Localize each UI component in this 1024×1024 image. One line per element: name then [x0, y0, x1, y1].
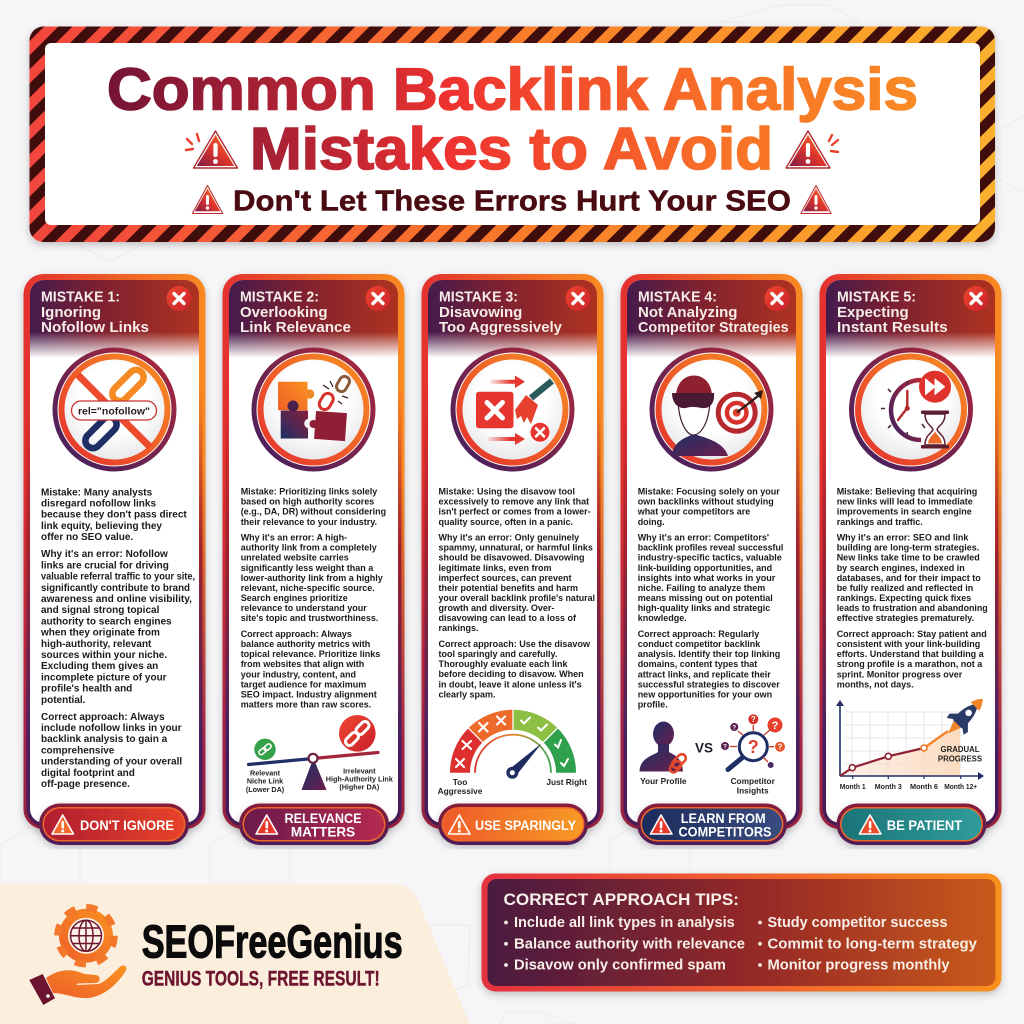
- text: why it's an error: valuable referral traffic to your site,: [41, 572, 195, 583]
- text: mistake: isn't perfect or comes from a lower-: [438, 507, 591, 517]
- text: mistake: because they don't pass direct: [41, 510, 187, 521]
- card title: Instant Results: [837, 319, 948, 336]
- text: mistake: Mistake: Many analysts: [41, 488, 153, 498]
- text: correct approach: topical relevance. Prioritize links: [241, 649, 380, 659]
- chart: profile versus competitor: Insights: [737, 785, 769, 795]
- text: why it's an error: profile's health and: [41, 684, 132, 695]
- text: why it's an error: awareness and online visibility,: [41, 594, 192, 605]
- card title: MISTAKE 3:: [439, 289, 518, 306]
- text: correct approach: attract links, and replicate their: [638, 669, 771, 679]
- icon: close badge: [764, 286, 790, 311]
- icon: disavow broom: [453, 350, 572, 469]
- text: correct approach: conduct competitor backlink: [638, 639, 761, 649]
- text: why it's an error: your overall backlink profile's natural: [438, 593, 595, 603]
- text: mistake: quality source, often in a panic.: [438, 517, 573, 527]
- tips column 1: Include all link types in analysis: [514, 915, 735, 931]
- text: mistake: Mistake: Using the disavow tool: [438, 487, 575, 497]
- text: why it's an error: links are crucial for driving: [41, 560, 169, 571]
- text: mistake: excessively to remove any link that: [438, 497, 589, 507]
- icon: warning left large: [186, 131, 238, 168]
- chart: balance scale: [246, 715, 393, 794]
- text: why it's an error: knowledge.: [638, 613, 687, 623]
- chart: profile versus competitor: ?: [772, 720, 779, 732]
- text: why it's an error: disavowing can lead to a loss of: [438, 613, 577, 623]
- text: correct approach: balance authority metrics with: [241, 639, 370, 649]
- chart: balance scale: Niche Link: [247, 776, 283, 786]
- text: why it's an error: growth and diversity. Over-: [438, 603, 554, 613]
- icon: close badge: [964, 286, 988, 311]
- card title: Link Relevance: [240, 319, 351, 336]
- badge: relevance matters: RELEVANCE: [284, 811, 362, 826]
- text: correct approach: include nofollow links in your: [41, 723, 182, 734]
- text: why it's an error: spammy, unnatural, or harmful links: [438, 543, 593, 553]
- chart: profile versus competitor: ?: [748, 737, 759, 757]
- chart: profile versus competitor: Your Profile: [640, 776, 687, 786]
- text: why it's an error: effective strategies prematurely.: [837, 613, 974, 623]
- text: why it's an error: authority to search engines: [41, 616, 172, 627]
- icon: clock, fast-forward and hourglass: [852, 350, 970, 469]
- banner subtitle: Don't Let These Errors Hurt Your SEO: [233, 186, 791, 218]
- tips column 1: Balance authority with relevance: [514, 936, 745, 952]
- badge: relevance matters: [239, 804, 389, 845]
- chart: balance scale: (Higher DA): [339, 782, 380, 792]
- text: mistake: Mistake: Prioritizing links solely: [241, 487, 377, 497]
- text: correct approach: in doubt, leave it alone unless it's: [438, 679, 582, 689]
- title banner: [30, 26, 995, 242]
- text: correct approach: profile.: [638, 699, 668, 709]
- text: correct approach: new opportunities for your own: [638, 689, 772, 699]
- tips column 1: [504, 915, 745, 974]
- text: correct approach: months, not days.: [837, 679, 914, 689]
- icon: warning left small: [192, 186, 223, 214]
- text: why it's an error: significantly less weight than a: [241, 563, 374, 573]
- card header: [229, 280, 398, 358]
- chart: balance scale: (Lower DA): [246, 785, 285, 794]
- text: why it's an error: Why it's an error: SEO and link: [837, 533, 969, 543]
- text: why it's an error: rankings. Expecting quick fixes: [837, 593, 971, 603]
- icon: blindfolded person and target: [652, 350, 771, 469]
- tips column 2: Commit to long-term strategy: [768, 936, 977, 952]
- chart: profile versus competitor: ?: [723, 744, 727, 750]
- text: correct approach: backlink analysis to gain a: [41, 734, 168, 745]
- card title: Competitor Strategies: [638, 319, 789, 336]
- chart: profile versus competitor: ?: [732, 724, 736, 732]
- text: correct approach: Correct approach: Always: [41, 712, 165, 723]
- chart: gradual progress: GRADUAL: [941, 745, 980, 754]
- text: mistake: Mistake: Focusing solely on your: [638, 487, 780, 497]
- text: correct approach: from websites that align with: [241, 659, 364, 669]
- card frame: [222, 274, 404, 829]
- logo tagline: GENIUS TOOLS, FREE RESULT!: [142, 967, 380, 991]
- text: correct approach: your industry, content, and: [241, 669, 356, 679]
- text: why it's an error: New links take time to be crawled: [837, 553, 980, 563]
- text: correct approach: Correct approach: Regularly: [638, 629, 759, 639]
- icon: close badge: [566, 286, 590, 311]
- card frame: [820, 274, 1002, 829]
- card frame: [620, 274, 802, 829]
- chart: profile versus competitor: ?: [778, 742, 783, 752]
- chart: profile versus competitor: Competitor: [731, 776, 776, 786]
- text: why it's an error: industry-specific tactics, valuable: [638, 553, 782, 563]
- panel: mistake 3: [422, 274, 604, 845]
- badge: relevance matters: MATTERS: [291, 824, 355, 840]
- chart: gradual progress: [836, 690, 992, 791]
- text: correct approach: comprehensive: [41, 745, 115, 756]
- text: mistake: disregard nofollow links: [41, 499, 156, 510]
- text: why it's an error: Why it's an error: Only genuinely: [438, 533, 579, 543]
- badge: be patient: [836, 804, 986, 845]
- badge: learn from competitors: [637, 804, 787, 845]
- tips column 1: Disavow only confirmed spam: [514, 958, 726, 974]
- card frame: [24, 274, 206, 829]
- text: correct approach: Correct approach: Stay patient and: [837, 629, 987, 639]
- text: mistake: Mistake: Believing that acquiring: [837, 487, 977, 497]
- chart: profile versus competitor: [640, 714, 785, 795]
- text: why it's an error: lower-authority link from a highly: [241, 573, 383, 583]
- text: why it's an error: significantly contribute to brand: [41, 583, 190, 594]
- chart: gradual progress: Month 12+: [944, 782, 978, 791]
- chart: balance scale: High-Authority Link: [326, 774, 393, 784]
- text: mistake: their relevance to your industry.: [241, 517, 377, 527]
- text: why it's an error: should be disavowed. Disavowing: [438, 553, 585, 563]
- text: why it's an error: relevant, niche-specific source.: [241, 583, 375, 593]
- text: why it's an error: incomplete picture of your: [41, 672, 167, 683]
- text: mistake: own backlinks without studying: [638, 497, 774, 507]
- logo name: SEOFreeGenius: [142, 915, 403, 967]
- text: correct approach: efforts. Understand that building a: [837, 649, 985, 659]
- card header: [826, 280, 995, 358]
- text: mistake: improvements in search engine: [837, 507, 972, 517]
- tips heading: CORRECT APPROACH TIPS:: [504, 891, 739, 909]
- panel: mistake 4: [620, 274, 802, 845]
- text: correct approach: understanding of your overall: [41, 757, 182, 768]
- text: correct approach: successful strategies to discover: [638, 679, 780, 689]
- card title: Too Aggressively: [439, 319, 563, 336]
- text: correct approach: analysis. Identify their top linking: [638, 649, 780, 659]
- text: why it's an error: be fully realized and reflected in: [837, 583, 973, 593]
- text: correct approach: clearly spam.: [438, 689, 496, 699]
- text: why it's an error: Why it's an error: Competitors': [638, 533, 769, 543]
- chart: gradual progress: Month 3: [875, 782, 902, 791]
- tips column 2: Study competitor success: [768, 915, 948, 931]
- chart: gradual progress: Month 1: [840, 782, 866, 791]
- text: why it's an error: high-authority, relevant: [41, 639, 152, 650]
- text: correct approach: off-page presence.: [41, 779, 130, 790]
- chart: gauge: Too: [453, 777, 467, 787]
- text: why it's an error: high-quality links and strategic: [638, 603, 770, 613]
- text: correct approach: SEO impact. Industry alignment: [241, 689, 377, 699]
- panel: mistake 2: [222, 274, 404, 845]
- text: why it's an error: imperfect sources, can prevent: [438, 573, 572, 583]
- text: why it's an error: unrelated website carries: [241, 553, 349, 563]
- tips box: [482, 874, 1002, 992]
- card title: MISTAKE 1:: [41, 289, 120, 306]
- chart: gradual progress: PROGRESS: [938, 754, 982, 764]
- card title: MISTAKE 5:: [837, 289, 916, 306]
- text: why it's an error: site's topic and trustworthiness.: [241, 613, 378, 623]
- text: mistake: rankings and traffic.: [837, 517, 923, 527]
- text: why it's an error: when they originate from: [40, 628, 160, 639]
- text: correct approach: strong profile is a marathon, not a: [837, 659, 983, 669]
- title line 2: Mistakes to Avoid: [250, 116, 773, 182]
- tips column 2: [758, 915, 977, 974]
- chart: balance scale: Irrelevant: [343, 766, 376, 776]
- text: why it's an error: means missing out on potential: [638, 593, 773, 603]
- banner inner panel: [45, 43, 980, 225]
- text: mistake: based on high authority scores: [241, 497, 374, 507]
- panel: correct approach tips: [482, 874, 1002, 992]
- chart: gauge: Just Right: [546, 777, 587, 787]
- icon: gear and hand logo: [29, 908, 126, 1005]
- text: correct approach: Thoroughly evaluate each link: [438, 659, 569, 669]
- chart: balance scale: Relevant: [250, 768, 281, 778]
- chart: profile versus competitor: ?: [751, 715, 756, 724]
- card title: Disavowing: [439, 304, 522, 321]
- card title: MISTAKE 4:: [638, 289, 717, 306]
- text: why it's an error: potential.: [41, 695, 86, 706]
- card title: Nofollow Links: [41, 319, 149, 336]
- text: why it's an error: Search engines prioritize: [241, 593, 348, 603]
- text: correct approach: matters more than raw scores.: [241, 699, 371, 709]
- text: correct approach: Correct approach: Use the disavow: [438, 639, 591, 649]
- badge: be patient: BE PATIENT: [887, 818, 963, 833]
- text: why it's an error: backlink profiles reveal successful: [638, 543, 783, 553]
- icon: nofollow link: [55, 350, 174, 469]
- text: why it's an error: authority link from a completely: [241, 543, 377, 553]
- text: why it's an error: rankings.: [438, 623, 479, 633]
- panel: mistake 5: [820, 274, 1002, 845]
- badge: learn from competitors: COMPETITORS: [678, 824, 772, 840]
- badge: don't ignore: DON'T IGNORE: [80, 818, 174, 833]
- text: why it's an error: link-building opportunities, and: [638, 563, 772, 573]
- card header: [428, 280, 597, 358]
- badge: use sparingly: USE SPARINGLY: [475, 818, 576, 833]
- text: correct approach: domains, content types that: [638, 659, 757, 669]
- text: correct approach: before deciding to disavow. When: [438, 669, 584, 679]
- text: mistake: doing.: [638, 517, 665, 527]
- title line 1: Common Backlink Analysis: [107, 56, 918, 122]
- text: correct approach: consistent with your link-building: [837, 639, 980, 649]
- chart: gauge: [438, 710, 587, 796]
- panel: mistake 1: [24, 274, 206, 845]
- text: mistake: new links will lead to immediate: [837, 497, 973, 507]
- text: why it's an error: and signal strong topical: [41, 605, 160, 616]
- card header: [627, 280, 796, 358]
- icon: close badge: [366, 286, 390, 311]
- chart: gauge: Aggressive: [438, 786, 483, 796]
- icon: nofollow link: rel="nofollow": [78, 406, 150, 418]
- text: why it's an error: Why it's an error: A high-: [241, 533, 347, 543]
- banner hazard-stripe frame: [30, 26, 995, 242]
- chart: profile versus competitor: VS: [695, 740, 713, 756]
- text: why it's an error: insights into what works in your: [638, 573, 776, 583]
- icon: warning right large: [786, 131, 838, 168]
- text: why it's an error: by search engines, indexed in: [837, 563, 965, 573]
- text: why it's an error: relevance to understand your: [241, 603, 367, 613]
- text: correct approach: target audience for maximum: [241, 679, 366, 689]
- card header: [30, 280, 199, 358]
- text: correct approach: digital footprint and: [41, 768, 135, 779]
- badge: use sparingly: [438, 804, 588, 845]
- text: correct approach: tool sparingly and carefully.: [438, 649, 557, 659]
- logo background: [0, 884, 470, 1024]
- text: why it's an error: legitimate links, even from: [438, 563, 552, 573]
- card title: Overlooking: [240, 304, 328, 321]
- text: mistake: (e.g., DA, DR) without considering: [241, 507, 386, 517]
- icon: close badge: [166, 286, 192, 311]
- card title: Expecting: [837, 304, 909, 321]
- icon: puzzle and broken link: [254, 350, 373, 469]
- card title: Ignoring: [41, 304, 101, 321]
- text: why it's an error: databases, and for their impact to: [837, 573, 981, 583]
- badge: don't ignore: [39, 804, 189, 845]
- text: why it's an error: Excluding them gives an: [41, 661, 158, 672]
- panel: logo area: [0, 884, 470, 1024]
- text: why it's an error: niche. Failing to analyze them: [638, 583, 765, 593]
- card frame: [422, 274, 604, 829]
- card title: MISTAKE 2:: [240, 289, 319, 306]
- icon: warning right small: [801, 186, 831, 214]
- text: mistake: offer no SEO value.: [41, 532, 133, 543]
- text: why it's an error: their potential benefits and harm: [438, 583, 578, 593]
- text: mistake: link equity, believing they: [41, 521, 162, 532]
- text: why it's an error: sources within your niche.: [41, 650, 167, 661]
- text: correct approach: Correct approach: Always: [241, 629, 352, 639]
- tips column 2: Monitor progress monthly: [768, 958, 950, 974]
- text: correct approach: sprint. Monitor progress over: [837, 669, 963, 679]
- text: mistake: what your competitors are: [637, 507, 750, 517]
- card title: Not Analyzing: [638, 304, 737, 321]
- chart: gradual progress: Month 6: [910, 782, 938, 791]
- text: why it's an error: leads to frustration and abandoning: [837, 603, 988, 613]
- text: why it's an error: building are long-term strategies.: [837, 543, 979, 553]
- text: why it's an error: Why it's an error: Nofollow: [41, 549, 168, 560]
- badge: learn from competitors: LEARN FROM: [681, 811, 766, 826]
